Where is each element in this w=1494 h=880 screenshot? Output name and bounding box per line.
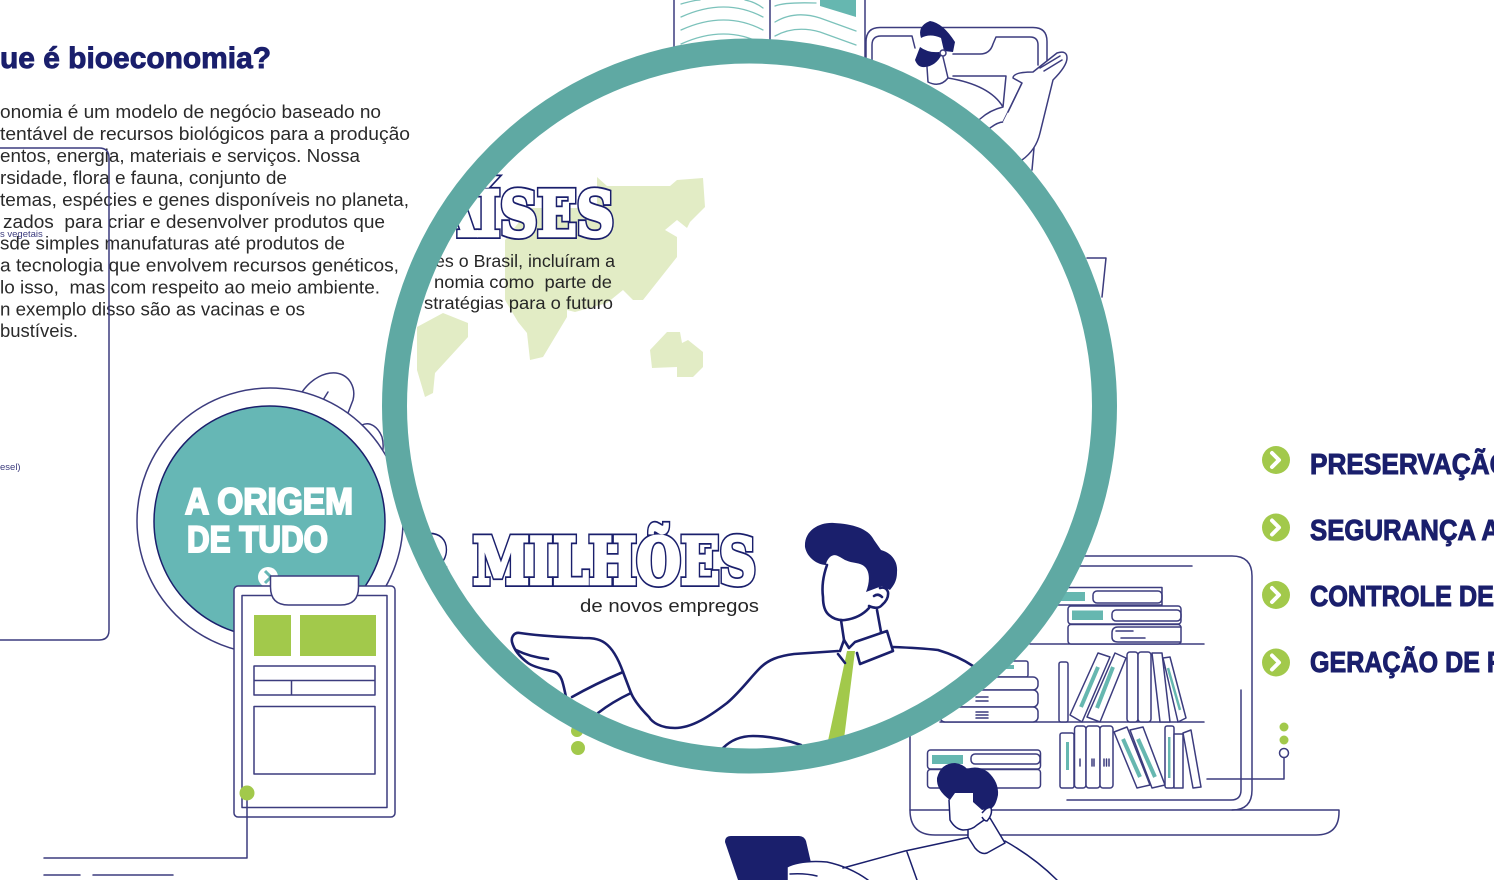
panel: ring contents bbox=[414, 177, 973, 755]
panel: open book top bbox=[674, 0, 865, 60]
books top shelf bbox=[1040, 588, 1181, 644]
panel: stopwatch a origem de tudo: A ORIGEM bbox=[185, 481, 353, 522]
stat: países: AÍSES bbox=[435, 178, 614, 250]
text block: definition of bioeconomy: sde simples manufaturas até produtos de bbox=[0, 234, 345, 254]
text block: definition of bioeconomy: bustíveis. bbox=[0, 321, 78, 341]
stat: países bbox=[456, 174, 614, 240]
ring bbox=[394, 51, 1104, 761]
icon: chevron 2 bbox=[1262, 514, 1290, 542]
illustration: laptop with bookshelf bbox=[910, 556, 1339, 835]
text block: definition of bioeconomy: rsidade, flora e fauna, conjunto de bbox=[0, 168, 287, 188]
world map bbox=[417, 177, 705, 397]
panel: clipped outline card at left: s vegetais bbox=[0, 229, 43, 240]
green dots under the ring bbox=[571, 725, 585, 755]
text block: definition of bioeconomy: a tecnologia que envolvem recursos genéticos, bbox=[0, 256, 399, 276]
illustration: bearded man at screen bbox=[866, 21, 1067, 170]
illustration: man with green tie bbox=[512, 523, 973, 755]
text block: definition of bioeconomy: tentável de recursos biológicos para a produção bbox=[0, 124, 410, 144]
stat: milhões: 2 bbox=[414, 524, 449, 600]
panel: stopwatch a origem de tudo: DE TUDO bbox=[187, 519, 328, 560]
text: de novos empregos: de novos empregos bbox=[580, 595, 759, 616]
heading: o que é bioeconomia: ue é bioeconomia? bbox=[0, 42, 271, 75]
text: países description: es o Brasil, incluíram a bbox=[435, 251, 615, 271]
panel: clipboard bbox=[44, 576, 395, 875]
text block: definition of bioeconomy: entos, energia, materiais e serviços. Nossa bbox=[0, 146, 361, 166]
text block: definition of bioeconomy: n exemplo disso são as vacinas e os bbox=[0, 300, 305, 320]
icon: chevron 3 bbox=[1262, 581, 1290, 609]
text: países description: nomia como parte de bbox=[434, 272, 612, 292]
stat: milhões bbox=[431, 520, 756, 588]
text: países description bbox=[424, 251, 615, 313]
icon: chevron 4 bbox=[1262, 648, 1290, 676]
books bottom shelf bbox=[928, 726, 1201, 788]
stat: milhões: MILHÕES bbox=[473, 524, 756, 600]
illustration: extra frame piece behind the ring bbox=[1087, 258, 1106, 297]
text block: definition of bioeconomy: onomia é um modelo de negócio baseado no bbox=[0, 102, 381, 122]
panel: stopwatch a origem de tudo bbox=[137, 373, 403, 654]
connector with dots bbox=[1207, 722, 1288, 779]
list: benefits bbox=[1262, 446, 1494, 679]
white disc inside ring bbox=[400, 56, 1100, 756]
text block: definition of bioeconomy bbox=[0, 102, 410, 341]
panel: clipped outline card at left bbox=[0, 148, 109, 640]
stat: milhões: MILHÕES bbox=[473, 524, 756, 600]
panel: clipped outline card at left: esel) bbox=[0, 462, 21, 473]
illustration: person with tablet bbox=[725, 763, 1057, 880]
text: países description: stratégias para o futuro bbox=[424, 293, 613, 313]
text block: definition of bioeconomy: temas, espécies e genes disponíveis no planeta, bbox=[0, 190, 409, 210]
stat: países: AÍSES bbox=[435, 178, 614, 250]
text block: definition of bioeconomy: lo isso, mas com respeito ao meio ambiente. bbox=[0, 278, 380, 298]
icon: chevron 1 bbox=[1262, 446, 1290, 474]
books middle shelf bbox=[940, 652, 1186, 722]
stat: milhões: 2 bbox=[414, 524, 449, 600]
text block: definition of bioeconomy: zados para criar e desenvolver produtos que bbox=[3, 212, 385, 232]
